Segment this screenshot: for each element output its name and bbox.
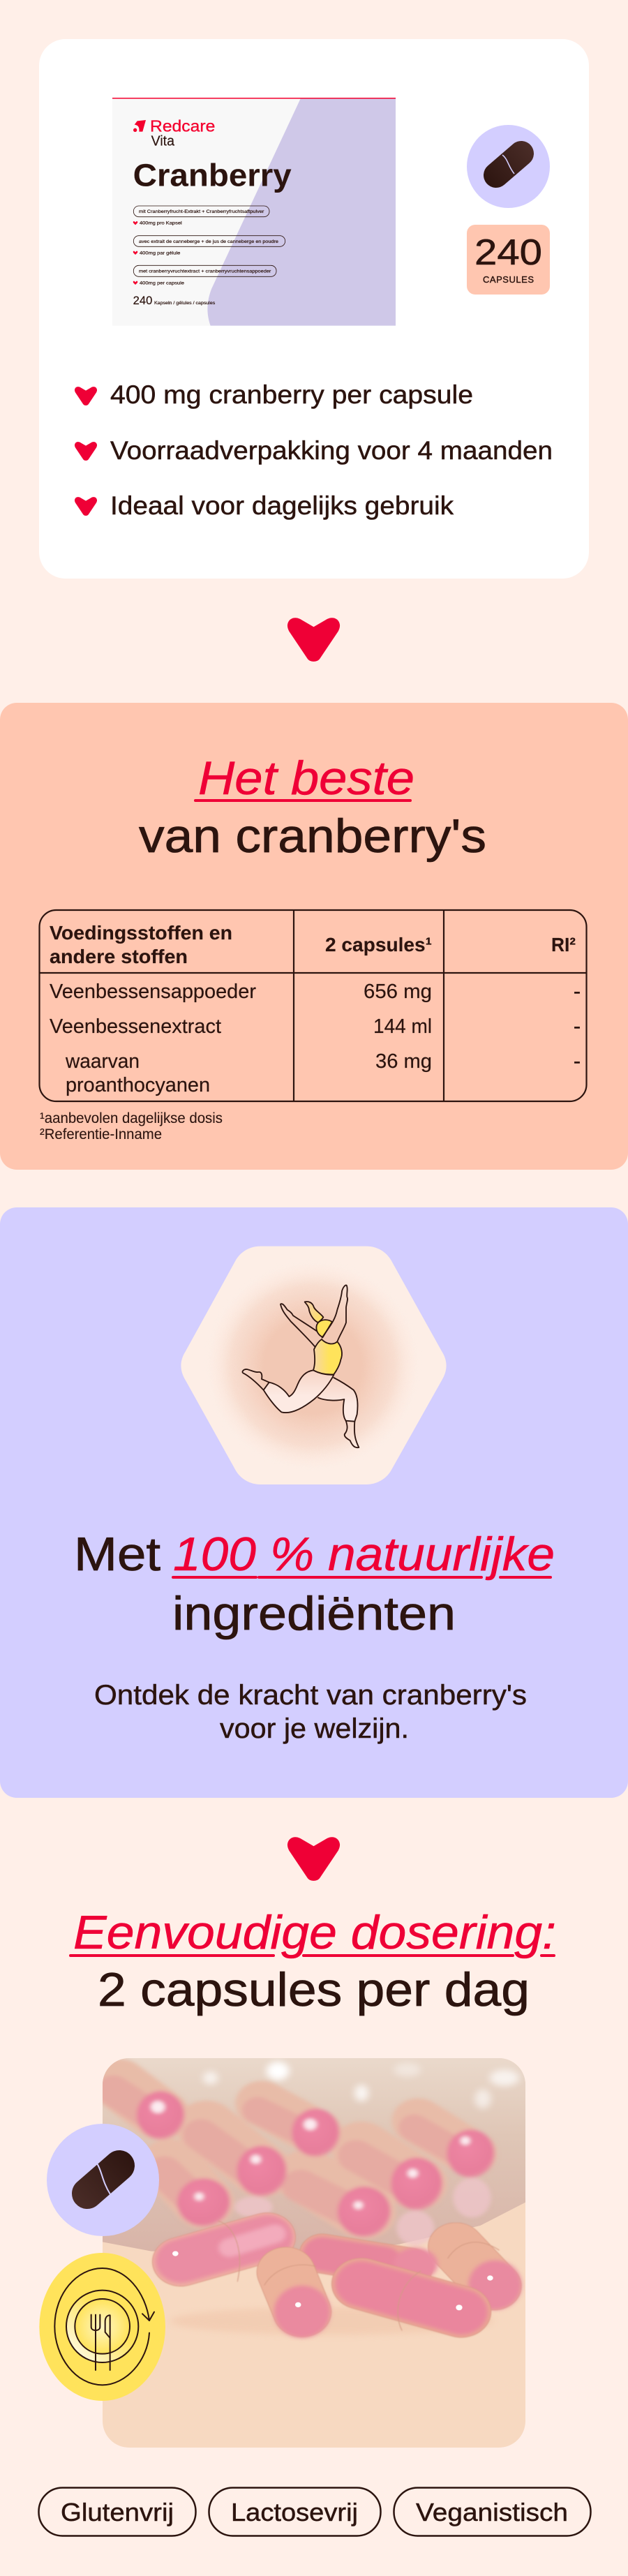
tag: veganistisch: Veganistisch	[416, 2498, 568, 2526]
nutrition table: 144 ml	[373, 1015, 432, 1038]
nutrition table: proanthocyanen	[66, 1074, 210, 1096]
panel: product card	[39, 39, 589, 579]
capsule: left	[181, 2221, 275, 2281]
tag: lactosevrij	[209, 2487, 381, 2536]
product box: Kapseln / gélules / capsules	[154, 301, 215, 306]
icon: plate with cutlery	[39, 2253, 165, 2401]
product box: Cranberry	[133, 158, 292, 193]
benefit: voorraadverpakking: Voorraadverpakking voor 4 maanden	[110, 436, 553, 465]
nutrition table: 656 mg	[364, 981, 432, 1003]
footnotes: ¹aanbevolen dagelijkse dosis	[40, 1110, 223, 1126]
capsule: right	[448, 2242, 521, 2309]
nutrition table: -	[574, 981, 581, 1003]
heading: 2 capsules per dag: 2 capsules per dag	[98, 1963, 530, 2016]
tag: glutenvrij: Glutenvrij	[61, 2498, 174, 2526]
icon: heart divider 1	[287, 618, 340, 662]
icon: heart divider 2	[287, 1837, 340, 1881]
capsule: front centre	[264, 2265, 330, 2338]
product box: avec extrait de canneberge + de jus de canneberge en poudre	[139, 239, 278, 244]
capsule: middle back	[322, 2248, 438, 2280]
icon: capsule badge	[467, 125, 550, 208]
heading: 100% natuurlijke: 100 % natuurlijke	[173, 1528, 555, 1581]
footnotes: ²Referentie-Inname	[40, 1126, 162, 1142]
panel: nutrition	[0, 703, 628, 1170]
badge: 240 capsules	[467, 225, 550, 295]
panel: natural ingredients	[0, 1207, 628, 1798]
badge: 240 capsules: CAPSULES	[483, 274, 534, 285]
photo: pink capsules	[103, 2058, 525, 2448]
product box	[112, 98, 396, 326]
product box: 400mg pro Kapsel	[140, 221, 182, 226]
capsules foreground	[181, 2221, 521, 2338]
nutrition table: -	[574, 1015, 581, 1038]
nutrition table: RI²	[551, 934, 576, 955]
benefit: 400 mg: 400 mg cranberry per capsule	[110, 380, 473, 409]
body text	[94, 1680, 527, 1744]
product box: 400mg par gélule	[140, 251, 181, 256]
footnotes	[40, 1110, 223, 1142]
product box: 400mg per capsule	[140, 281, 184, 285]
heading: van cranberry's: van cranberry's	[139, 810, 486, 863]
product box: mit Cranberryfrucht-Extrakt + Cranberryfruchtsaftpulver	[139, 209, 264, 214]
heading: het beste: Het beste	[198, 752, 414, 805]
nutrition table: Veenbessensappoeder	[50, 981, 256, 1003]
nutrition table: -	[574, 1050, 581, 1073]
nutrition table: Veenbessenextract	[50, 1015, 221, 1038]
badge: 240 capsules: 240	[474, 232, 542, 273]
icon: capsule overlay badge	[47, 2124, 159, 2236]
capsule: front right	[361, 2271, 461, 2330]
product box: Redcare	[150, 117, 215, 135]
product box: 240	[133, 294, 152, 307]
nutrition table: 36 mg	[375, 1050, 432, 1073]
product box: met cranberryvruchtextract + cranberryvruchtensappoeder	[139, 269, 271, 274]
product box: Vita	[151, 133, 175, 149]
tag: veganistisch	[394, 2487, 590, 2536]
heading: ingrediënten: ingrediënten	[172, 1587, 456, 1640]
benefit: dagelijks gebruik: Ideaal voor dagelijks gebruik	[110, 491, 454, 520]
body text: voor je welzijn.	[220, 1713, 409, 1744]
nutrition table: waarvan	[65, 1050, 140, 1073]
heading: eenvoudige dosering: Eenvoudige dosering:	[73, 1906, 556, 1959]
nutrition table: Voedingsstoffen en	[50, 922, 232, 944]
heading: 100% natuurlijke: Met	[74, 1528, 160, 1581]
nutrition table	[39, 910, 586, 1101]
tag: glutenvrij	[39, 2487, 195, 2536]
icon: hexagon with dancer	[181, 1246, 447, 1484]
nutrition table: andere stoffen	[50, 946, 188, 967]
nutrition table: 2 capsules¹	[325, 934, 432, 955]
tag: lactosevrij: Lactosevrij	[231, 2498, 358, 2526]
body text: Ontdek de kracht van cranberry's	[94, 1680, 527, 1711]
